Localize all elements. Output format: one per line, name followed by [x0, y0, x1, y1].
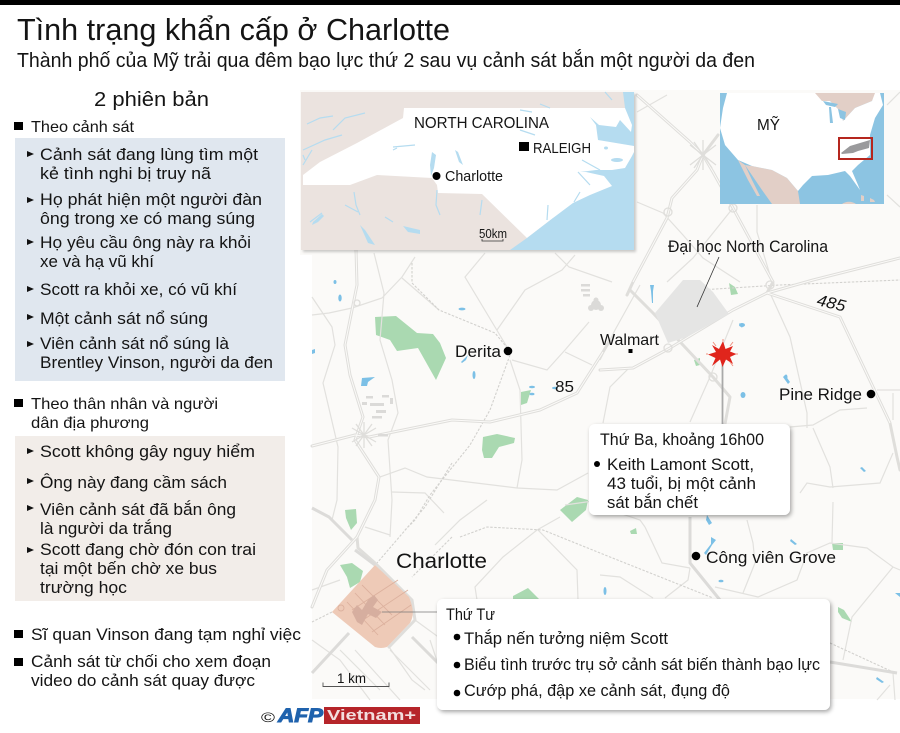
panel: police version: Cảnh sát đang lùng tìm một [40, 146, 258, 164]
panel: police version: ông trong xe có mang súng [40, 210, 255, 228]
label: Pine Ridge: Pine Ridge [779, 385, 862, 404]
interchanges [352, 140, 774, 448]
callout: Wednesday: Cướp phá, đập xe cảnh sát, đụng độ [464, 682, 730, 700]
panel: police version: Scott ra khỏi xe, có vũ khí [40, 281, 237, 299]
title: Tình trạng khẩn cấp ở Charlotte [17, 12, 450, 47]
housing blocks [362, 284, 604, 436]
label: university [668, 238, 829, 307]
leader line: downtown to callout [382, 611, 438, 613]
panel: police version [15, 138, 285, 381]
section heading: relatives and locals: Theo thân nhân và người [31, 396, 218, 413]
map: street background [300, 90, 900, 700]
downtown Charlotte area [332, 565, 413, 648]
panel: relatives version: Scott không gây nguy hiểm [40, 443, 255, 461]
subtitle: Thành phố của Mỹ trải qua đêm bạo lực thứ 2 sau vụ cảnh sát bắn một người da đen [17, 49, 755, 72]
panel: relatives version: tại một bến chờ xe bus [40, 560, 217, 578]
panel: police version: xe và hạ vũ khí [40, 253, 154, 271]
parks [340, 283, 852, 622]
panel: police version: kẻ tình nghi bị truy nã [40, 165, 212, 183]
NC state [303, 108, 634, 238]
inset map: North Carolina [301, 92, 634, 250]
USA [720, 93, 883, 191]
label: Công viên Grove: Công viên Grove [706, 548, 836, 567]
callout: Wednesday [437, 599, 830, 710]
atlantic and sounds [590, 92, 634, 146]
minor roads [312, 92, 900, 700]
rail lines [312, 263, 900, 672]
credit logos: AFP [277, 706, 323, 727]
label: Derita: Derita [455, 342, 502, 361]
panel: police version: Viên cảnh sát nổ súng là [40, 335, 230, 353]
label USA: MỸ [757, 114, 780, 134]
inset labels: NORTH CAROLINA [414, 115, 549, 132]
panel: police version: Họ yêu cầu ông này ra khỏi [40, 234, 251, 252]
label: highway 85: 85 [555, 379, 574, 396]
section heading: relatives and locals [14, 396, 218, 432]
inset labels: Charlotte [445, 169, 503, 185]
label: highway 485: 485 [815, 292, 847, 315]
label: university: Đại học North Carolina [668, 238, 829, 256]
callout: Tuesday: 43 tuổi, bị một cảnh [607, 475, 756, 493]
icon: shooting burst [706, 339, 738, 367]
scale bar: 1 km: 1 km [337, 670, 366, 686]
panel: police version: Brentley Vinson, người da đen [40, 354, 273, 372]
inset labels [414, 115, 591, 241]
Canada [812, 93, 876, 121]
callout: Tuesday [589, 424, 790, 515]
panel: police version: Một cảnh sát nổ súng [40, 310, 208, 328]
callout: Tuesday: Keith Lamont Scott, [607, 456, 754, 474]
credit logos [261, 706, 420, 727]
callout: Wednesday: Thứ Tư [446, 606, 495, 624]
note: video withheld: video do cảnh sát quay được [31, 672, 255, 690]
panel: police version: Họ phát hiện một người đàn [40, 191, 262, 209]
callout: Wednesday: Thắp nến tưởng niệm Scott [464, 629, 668, 648]
panel: relatives version: Scott đang chờ đón con trai [40, 541, 256, 559]
inset labels: RALEIGH [533, 140, 591, 157]
callout: Wednesday: Biểu tình trước trụ sở cảnh sát biến thành bạo lực [464, 656, 820, 674]
label: Charlotte: Charlotte [396, 549, 487, 573]
callout: Tuesday: Thứ Ba, khoảng 16h00 [600, 431, 764, 449]
Caribbean [842, 195, 875, 204]
inset labels: 50km [479, 226, 507, 241]
callout: Tuesday: sát bắn chết [607, 493, 698, 512]
credit logos: Vietnam+ [327, 707, 416, 724]
lakes [312, 280, 900, 683]
panel: relatives version [15, 436, 285, 601]
leader line: shooting site to callout [722, 362, 724, 426]
scale bar: 1 km [323, 670, 389, 686]
note: video withheld: Cảnh sát từ chối cho xem đoạn [31, 653, 271, 671]
highways [312, 95, 900, 673]
panel: relatives version: là người da trắng [40, 519, 172, 538]
panel: relatives version: Ông này đang cầm sách [40, 473, 227, 492]
label: Walmart: Walmart [600, 332, 660, 349]
panel: relatives version: trường học [40, 579, 127, 597]
panel: relatives version: Viên cảnh sát đã bắn ông [40, 500, 236, 519]
top black bar [0, 0, 900, 5]
NC shape [841, 140, 870, 154]
left column heading: 2 phiên bản [94, 89, 209, 111]
great lakes [823, 101, 846, 123]
note: video withheld [14, 653, 271, 690]
section heading: relatives and locals: dân địa phương [31, 415, 149, 432]
campus: University of North Carolina [655, 280, 729, 343]
note: officer on leave: Sĩ quan Vinson đang tạm nghỉ việc [31, 626, 301, 644]
Mexico [745, 165, 800, 204]
credit logos: © [261, 709, 276, 725]
red locator box [839, 138, 872, 159]
section heading: police: Theo cảnh sát [31, 119, 135, 136]
inset map: USA locator [720, 93, 884, 204]
